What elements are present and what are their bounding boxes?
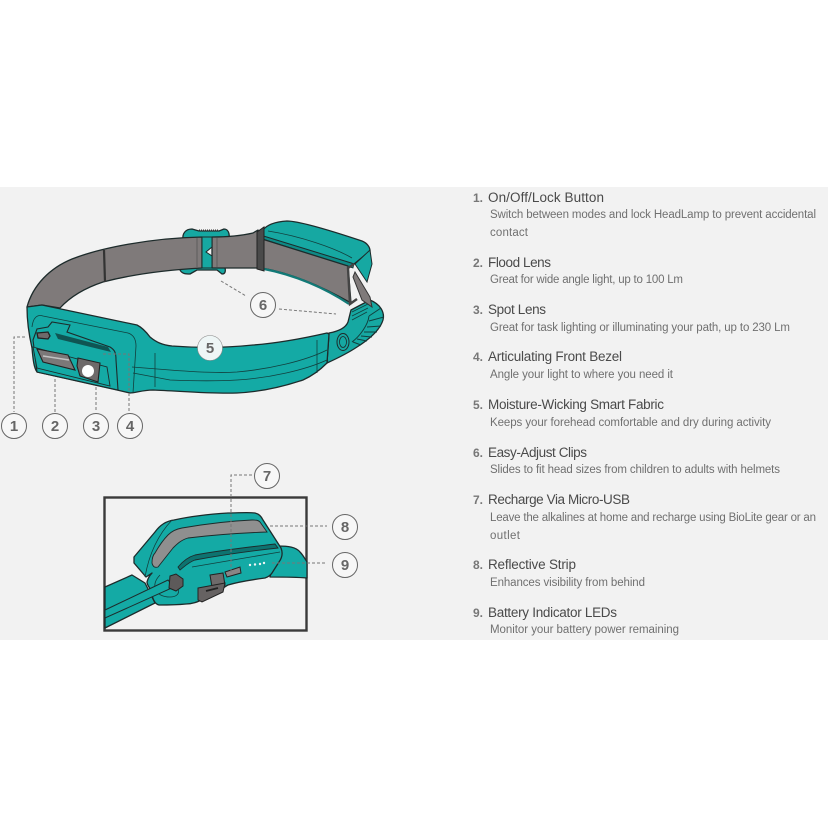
rear detail inset (104, 498, 307, 630)
item 8: Reflective Strip (488, 557, 576, 572)
callout 9: 9 (341, 557, 349, 574)
callout 5: 5 (206, 340, 214, 357)
item 9: 9. (473, 606, 483, 620)
item 2: Great for wide angle light, up to 100 Lm (490, 274, 683, 286)
band seams (132, 350, 327, 372)
item 7 (473, 492, 816, 542)
item 3 (473, 302, 790, 334)
left strap (105, 575, 155, 628)
item 7: Leave the alkalines at home and recharge using BioLite gear or an (490, 512, 816, 524)
callout 4 (118, 414, 142, 438)
item 3: Spot Lens (488, 302, 546, 317)
item 6: Slides to fit head sizes from children to adults with helmets (490, 464, 780, 476)
item 4: 4. (473, 350, 483, 364)
item 1: Switch between modes and lock HeadLamp to prevent accidental (490, 209, 816, 221)
front teal band (27, 305, 329, 393)
callout 8: 8 (341, 519, 349, 536)
feature list (473, 190, 816, 636)
item 7: Recharge Via Micro-USB (488, 492, 630, 507)
item 5: Moisture-Wicking Smart Fabric (488, 397, 664, 412)
background panel (0, 187, 828, 640)
easy-adjust clip lobes (180, 229, 229, 274)
callout 6: 6 (259, 297, 267, 314)
headband: mid grey fabric (212, 230, 258, 268)
item 1: 1. (473, 191, 483, 205)
flood lens (37, 349, 75, 370)
callout 4: 4 (126, 418, 135, 435)
callout 6 (250, 292, 276, 318)
callout 7: 7 (263, 468, 271, 485)
front bezel (32, 315, 136, 393)
callout 3 (84, 414, 108, 438)
coiled cord (327, 272, 384, 363)
item 5 (473, 397, 771, 429)
item 3: 3. (473, 303, 483, 317)
item 1: On/Off/Lock Button (488, 190, 604, 205)
item 1 (473, 190, 816, 239)
item 8 (473, 557, 645, 589)
clip centre bar (202, 237, 212, 268)
battery body (134, 513, 282, 605)
main headlamp illustration (27, 221, 384, 393)
charging port cover (198, 573, 225, 602)
item 7: outlet (490, 530, 521, 542)
callout 9 (332, 552, 358, 578)
cord and strap (155, 575, 179, 597)
battery LEDs (249, 562, 265, 566)
item 2 (473, 255, 683, 286)
item 6 (473, 445, 780, 476)
rear battery pack (257, 221, 372, 304)
callout 2 (42, 414, 68, 438)
callout 1: 1 (10, 418, 18, 435)
item 3: Great for task lighting or illuminating your path, up to 230 Lm (490, 322, 790, 334)
item 4 (473, 349, 674, 381)
on/off button (37, 332, 50, 339)
callout 5 (198, 336, 222, 360)
item 4: Articulating Front Bezel (488, 349, 622, 364)
item 2: 2. (473, 256, 483, 270)
callout 1 (2, 414, 26, 438)
seam groove (178, 544, 278, 570)
item 6: 6. (473, 446, 483, 460)
right band (270, 546, 307, 578)
callout lines: main illustration (14, 281, 336, 412)
item 5: 5. (473, 398, 483, 412)
callout 8 (332, 514, 358, 540)
item 5: Keeps your forehead comfortable and dry during activity (490, 417, 771, 429)
item 9: Battery Indicator LEDs (488, 605, 617, 620)
item 8: Enhances visibility from behind (490, 577, 645, 589)
item 9 (473, 605, 679, 636)
micro-USB port (225, 567, 241, 577)
headband: left grey fabric (27, 237, 202, 308)
item 6: Easy-Adjust Clips (488, 445, 587, 460)
item 8: 8. (473, 558, 483, 572)
callout 2: 2 (51, 418, 59, 435)
callout lines: detail inset (231, 475, 327, 573)
item 4: Angle your light to where you need it (490, 369, 674, 381)
callout 7 (254, 464, 280, 488)
item 2: Flood Lens (488, 255, 551, 270)
spot lens (77, 358, 100, 382)
item 7: 7. (473, 493, 483, 507)
callout 3: 3 (92, 418, 100, 435)
reflective strip (152, 520, 267, 567)
item 1: contact (490, 227, 529, 239)
item 9: Monitor your battery power remaining (490, 624, 679, 636)
